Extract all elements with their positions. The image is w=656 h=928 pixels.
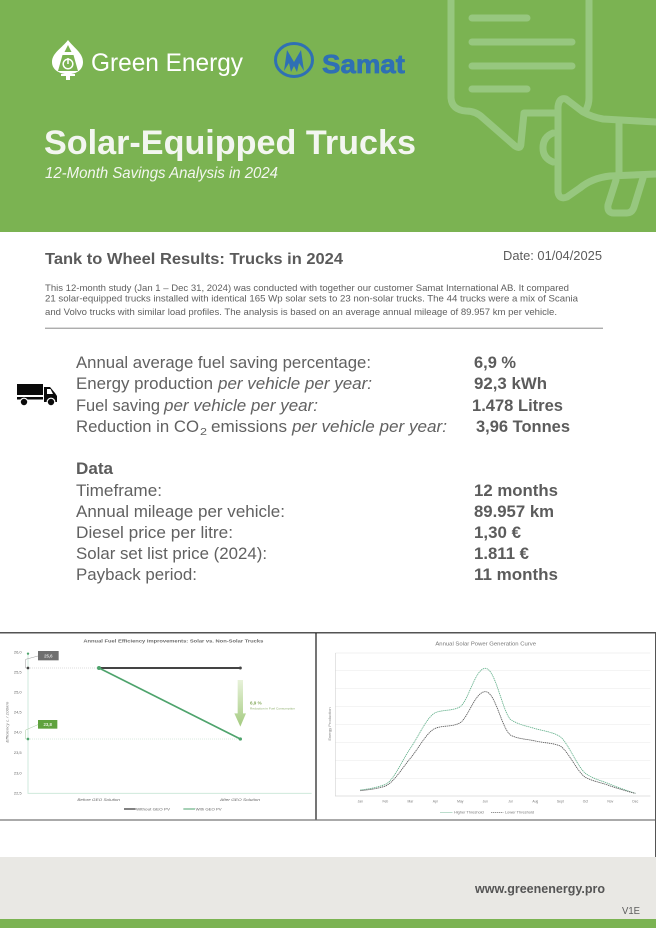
results list: emissions <box>211 417 287 436</box>
logo: Samat: Samat <box>322 49 405 79</box>
series: with GEO PV <box>97 666 242 741</box>
intro paragraph <box>45 283 579 317</box>
intro paragraph: 21 solar-equipped trucks installed with identical 165 Wp solar sets to 23 non-solar trucks. The 44 trucks were a mix of Scania <box>45 294 579 304</box>
data list <box>76 481 285 584</box>
version: V1E <box>622 906 640 917</box>
y axis ticks: 22,5 <box>14 790 22 795</box>
y axis label: Efficiency L / 100km <box>6 702 10 743</box>
legend <box>440 811 534 815</box>
data list: Payback period: <box>76 565 197 584</box>
results list: Energy production <box>76 374 213 393</box>
data values: 1.811 € <box>474 545 529 563</box>
callout: 25,6 <box>26 651 59 669</box>
results list: Reduction in CO <box>76 417 199 436</box>
legend <box>124 807 222 811</box>
results list: Fuel saving <box>76 396 160 415</box>
data values <box>474 482 558 584</box>
callout: 6,9 %: 6,9 % <box>250 701 262 706</box>
logo: Green Energy <box>52 40 243 80</box>
subtitle: 12-Month Savings Analysis in 2024 <box>45 165 278 182</box>
callout: 25,6: 25,6 <box>44 653 53 658</box>
title: Solar-Equipped Trucks <box>44 124 416 162</box>
month labels: Feb <box>382 799 388 803</box>
logo: Samat <box>276 44 405 79</box>
data list: Solar set list price (2024): <box>76 544 267 563</box>
heading: Tank to Wheel Results: Tank to Wheel Results: Trucks in 2024 <box>45 251 343 268</box>
intro paragraph: This 12-month study (Jan 1 – Dec 31, 2024) was conducted with together our customer Samat International AB. It compared <box>45 283 569 293</box>
y axis ticks: 24,5 <box>14 710 22 715</box>
legend: Lower Threshold <box>505 811 534 815</box>
month labels: Apr <box>433 799 439 803</box>
logo: Green Energy: Green Energy <box>91 49 243 77</box>
month labels: May <box>457 799 464 803</box>
data list: Timeframe: <box>76 481 162 500</box>
category labels <box>77 798 260 802</box>
month labels: Nov <box>607 799 614 803</box>
results list: 2 <box>200 427 208 438</box>
results list <box>76 353 447 438</box>
results values <box>472 354 570 436</box>
y axis ticks: 23,5 <box>14 750 22 755</box>
date: Date: 01/04/2025 <box>503 248 602 263</box>
category labels: After GEO Solution <box>219 798 260 802</box>
y axis ticks: 23,0 <box>14 770 22 775</box>
chart title: Annual Fuel Efficiency Improvements: Solar vs. Non-Solar Trucks <box>83 639 264 644</box>
results values: 3,96 Tonnes <box>476 418 570 436</box>
legend: With GEO PV <box>196 807 222 811</box>
results list: per vehicle per year: <box>291 417 447 436</box>
results values: 1.478 Litres <box>472 397 563 415</box>
month labels: Jan <box>358 799 363 803</box>
month labels: Jul <box>508 799 513 803</box>
month labels: Sept <box>557 799 564 803</box>
y axis ticks: 25,5 <box>14 669 22 674</box>
y axis ticks: 25,0 <box>14 690 22 695</box>
chart title: Annual Solar Power Generation Curve <box>435 642 536 648</box>
month labels: Jun <box>483 799 488 803</box>
y axis ticks <box>14 649 22 795</box>
results list: Annual average fuel saving percentage: <box>76 353 371 372</box>
header banner <box>0 0 656 232</box>
y axis label: Energy Production <box>328 707 332 741</box>
month labels: Dec <box>632 799 639 803</box>
category labels: Before GEO Solution <box>77 798 120 802</box>
data values: 89.957 km <box>474 503 554 521</box>
data heading: Data <box>76 460 114 478</box>
intro paragraph: and Volvo trucks with similar load profiles. The analysis is based on an average annual mileage of 89.957 km per vehicle. <box>45 307 557 317</box>
y axis ticks: 26,0 <box>14 649 22 654</box>
chart: annual solar power generation <box>328 642 650 815</box>
y axis ticks: 24,0 <box>14 730 22 735</box>
series: lower threshold <box>360 692 635 793</box>
month labels: Mar <box>407 799 414 803</box>
icon: speech bubble and megaphone <box>451 0 656 213</box>
footer band <box>0 857 656 928</box>
arrow: reduction <box>234 680 246 727</box>
legend: Without GEO PV <box>136 807 171 811</box>
website: www.greenenergy.pro <box>474 882 605 896</box>
data values: 11 months <box>474 566 558 584</box>
data list: Annual mileage per vehicle: <box>76 502 285 521</box>
series: without GEO PV <box>99 666 242 670</box>
results list: per vehicle per year: <box>217 374 372 393</box>
results values: 92,3 kWh <box>474 375 547 393</box>
series: higher threshold <box>360 668 635 793</box>
month labels: Aug <box>532 799 538 803</box>
callout: 23,8 <box>26 720 57 740</box>
chart: annual fuel efficiency <box>6 639 312 811</box>
callout: 23,8: 23,8 <box>43 722 52 727</box>
results list: per vehicle per year: <box>163 396 318 415</box>
results values: 6,9 % <box>474 354 516 372</box>
month labels <box>358 799 639 803</box>
data values: 12 months <box>474 482 558 500</box>
data list: Diesel price per litre: <box>76 523 233 542</box>
icon: truck <box>17 384 57 406</box>
legend: Higher Threshold <box>454 811 484 815</box>
callout: 6,9 %: Reduction in Fuel Consumption <box>250 707 296 711</box>
callout: 6,9 % <box>250 701 296 711</box>
data values: 1,30 € <box>474 524 521 542</box>
month labels: Oct <box>583 799 588 803</box>
